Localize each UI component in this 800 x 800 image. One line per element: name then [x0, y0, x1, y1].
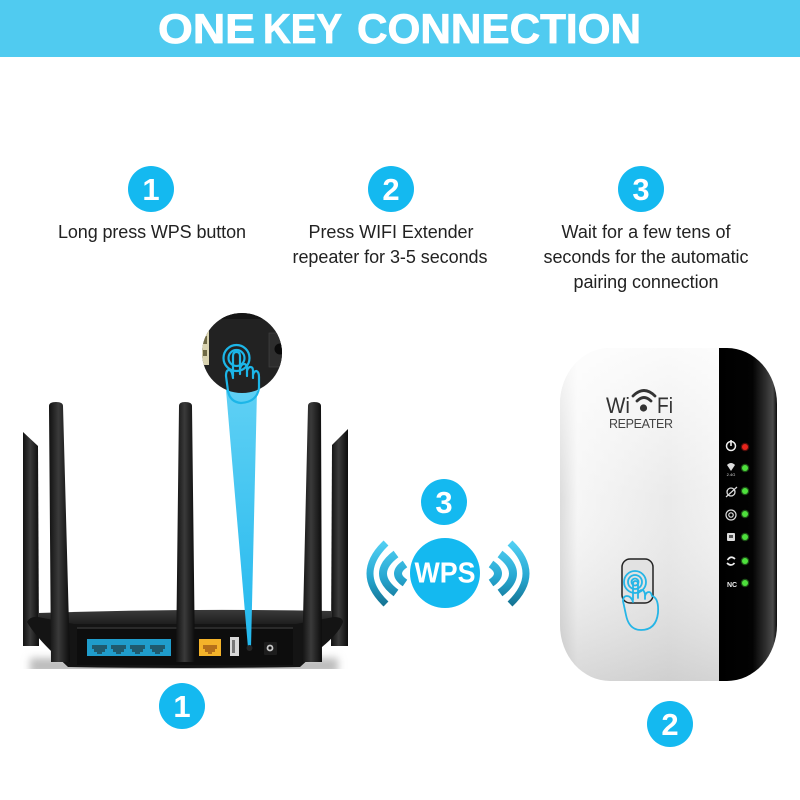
step 3 badge: 3	[435, 485, 453, 520]
power indicator	[726, 440, 748, 450]
header banner	[0, 0, 800, 57]
step 3 instruction: 3	[632, 172, 650, 207]
USB port	[230, 637, 239, 656]
step 1 badge: 1	[173, 689, 191, 724]
WPS button hole	[246, 645, 252, 651]
internet indicator	[726, 487, 748, 497]
2.4G indicator: 2.4G	[727, 472, 735, 477]
WiFi logo: Fi	[657, 393, 673, 418]
step 3 instruction: Wait for a few tens of	[562, 222, 731, 242]
step 3 badge	[421, 479, 467, 525]
touch hand icon	[224, 345, 259, 403]
NC indicator: NC	[727, 582, 737, 589]
title	[158, 5, 641, 52]
step 3 instruction: seconds for the automatic	[544, 247, 748, 267]
WAN port	[199, 639, 221, 656]
floor shadow	[30, 658, 338, 674]
front antennas	[49, 402, 322, 662]
router illustration	[23, 402, 348, 674]
LAN ports	[87, 639, 171, 656]
NC indicator	[727, 580, 748, 589]
sync indicator	[727, 557, 748, 565]
power socket	[264, 642, 277, 655]
step 1 instruction	[58, 166, 246, 242]
title: CONNECTION	[357, 5, 641, 52]
left signal waves	[370, 543, 405, 604]
step 3 instruction: pairing connection	[574, 272, 718, 292]
right signal waves	[491, 543, 526, 604]
WiFi repeater device	[560, 348, 777, 681]
step 3 instruction	[544, 166, 748, 292]
WPS button with hand	[622, 559, 658, 630]
WiFi logo: REPEATER	[609, 417, 673, 431]
WPS indicator	[726, 510, 748, 520]
WPS badge: WPS	[414, 558, 476, 590]
title: KEY	[263, 5, 342, 52]
white shell	[560, 348, 777, 681]
2.4G indicator	[727, 463, 748, 477]
step 1 instruction: 1	[142, 172, 160, 207]
step 2 badge	[647, 701, 693, 747]
WiFi logo	[606, 390, 673, 431]
magnified WPS button	[200, 312, 286, 403]
WPS signal group	[370, 479, 526, 608]
status LEDs	[726, 440, 748, 589]
step 1 badge	[159, 683, 205, 729]
WPS callout beam	[226, 390, 257, 648]
WPS badge	[410, 538, 480, 608]
step 1 instruction: Long press WPS button	[58, 222, 246, 242]
black side panel	[719, 348, 777, 681]
step 2 badge: 2	[661, 707, 679, 742]
step 2 instruction	[292, 166, 488, 267]
step 2 instruction: 2	[382, 172, 400, 207]
LAN indicator	[727, 533, 748, 541]
far antennas	[23, 429, 348, 646]
WiFi logo: Wi	[606, 393, 630, 418]
title: ONE	[158, 5, 255, 52]
step 2 instruction: repeater for 3-5 seconds	[292, 247, 488, 267]
step 2 instruction: Press WIFI Extender	[308, 222, 474, 242]
router body	[27, 610, 343, 668]
